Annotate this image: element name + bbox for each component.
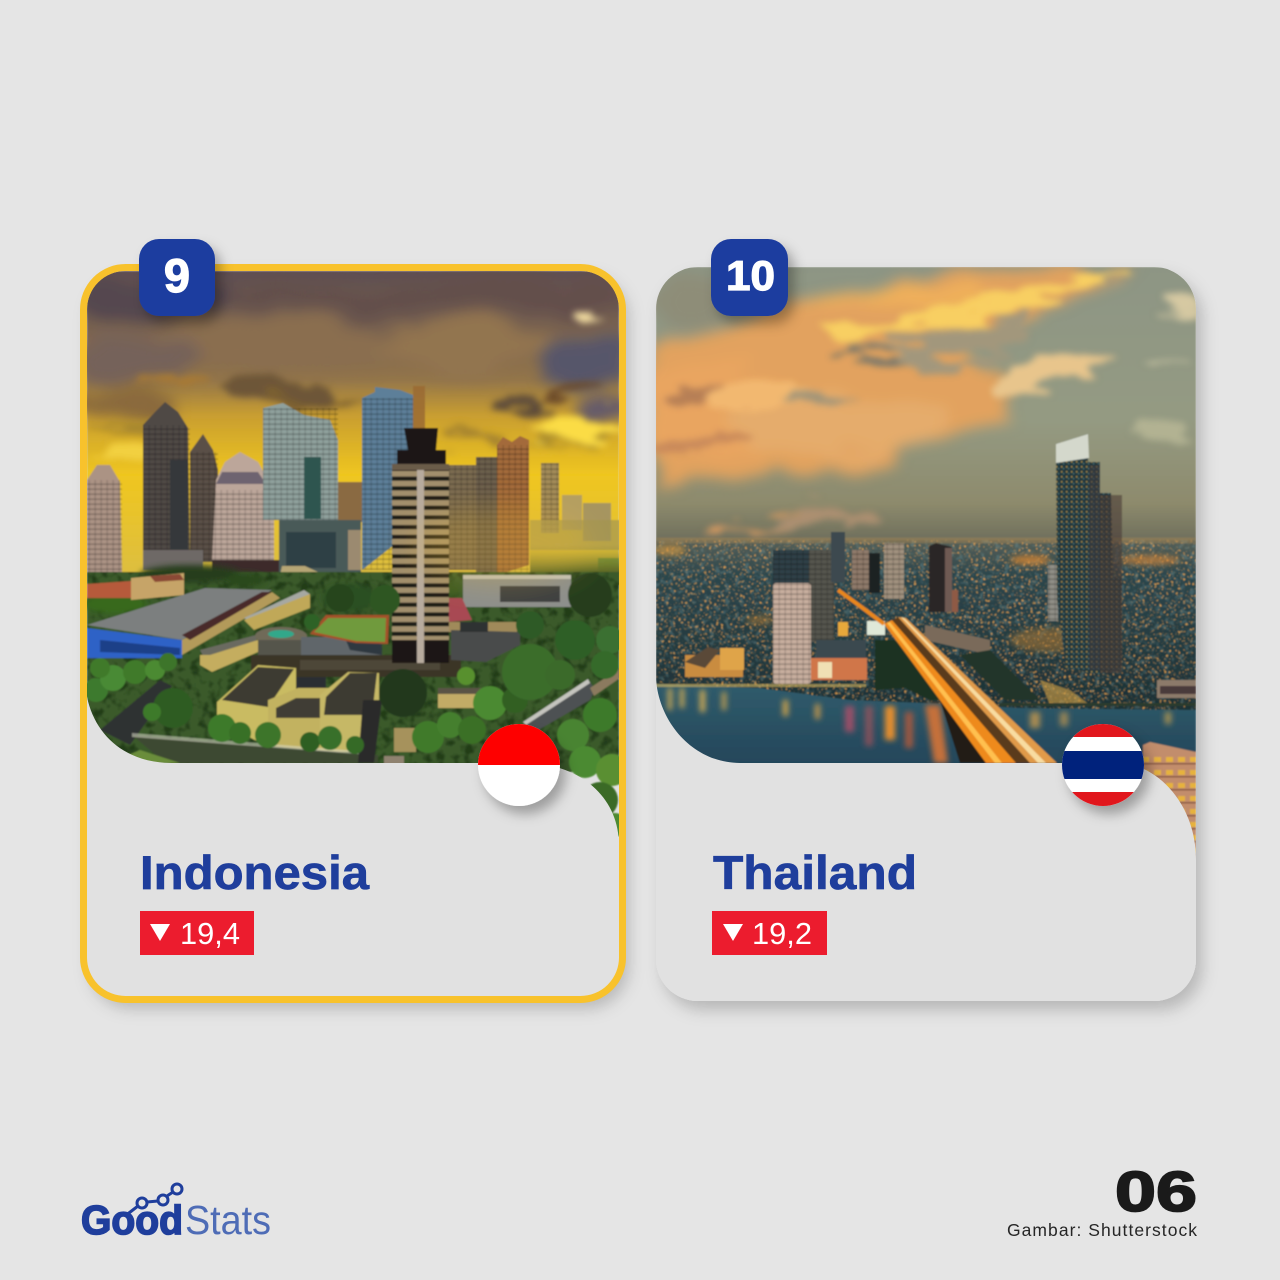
logo wordmark: Good (81, 1197, 183, 1243)
rank badge 9: 9 (164, 249, 190, 302)
image credit: Gambar: Shutterstock (1007, 1220, 1197, 1240)
logo: GoodStats: Stats (185, 1197, 271, 1243)
Ground and tree base (530, 545, 620, 585)
card 9 shadow base (84, 268, 622, 1000)
heading: Thailand: Thailand (713, 846, 917, 899)
score tag: 19,4 (140, 911, 254, 955)
river reflections (668, 688, 1171, 763)
score tag: 19,2 (712, 911, 827, 955)
panel: Thailand card (640, 239, 1197, 1005)
rank badge 10: 10 (726, 252, 775, 299)
River (656, 684, 1196, 770)
panel: Indonesia card (60, 239, 640, 1000)
light patch at Jakarta horizon (410, 505, 590, 585)
icon: Indonesia flag (478, 724, 560, 806)
Trees, Jakarta (84, 573, 628, 837)
Foreground building lower right (1143, 742, 1196, 870)
card 10 lower panel (656, 680, 1196, 870)
infographic canvas (80, 239, 1209, 1236)
Riverside buildings (685, 621, 1196, 705)
rank badge 10 (711, 239, 788, 316)
Bangkok towers (773, 532, 1058, 684)
Bangkok main tower (1056, 434, 1122, 675)
icon: Thailand flag (1060, 722, 1146, 808)
Low buildings, Jakarta (87, 573, 571, 689)
Central glass towers (263, 386, 425, 588)
score tag: 19,2: 19,2 (752, 916, 812, 951)
score tag: 19,4: 19,4 (180, 916, 240, 951)
photo: Jakarta skyline at sunset (87, 271, 619, 837)
Far left skyscrapers (87, 402, 280, 578)
Elevated highway with light trails (838, 590, 1057, 763)
page number: 06 (1115, 1160, 1197, 1224)
photo: Bangkok skyline at dusk (640, 267, 1197, 1005)
rank badge 9 (139, 239, 215, 316)
Black striped tower (392, 428, 449, 663)
card 9 lower panel (87, 697, 618, 837)
heading: Indonesia: Indonesia (140, 846, 370, 899)
card 10 shadow base (656, 267, 1196, 1001)
Bangkok city carpet (656, 540, 1196, 710)
logo: GoodStats (81, 1184, 271, 1243)
card 9 yellow outline (84, 268, 622, 1000)
Yellow heritage buildings (217, 665, 486, 764)
Roads, Jakarta (100, 668, 620, 763)
Right skyline (448, 436, 620, 575)
logo chart line icon (125, 1184, 182, 1216)
